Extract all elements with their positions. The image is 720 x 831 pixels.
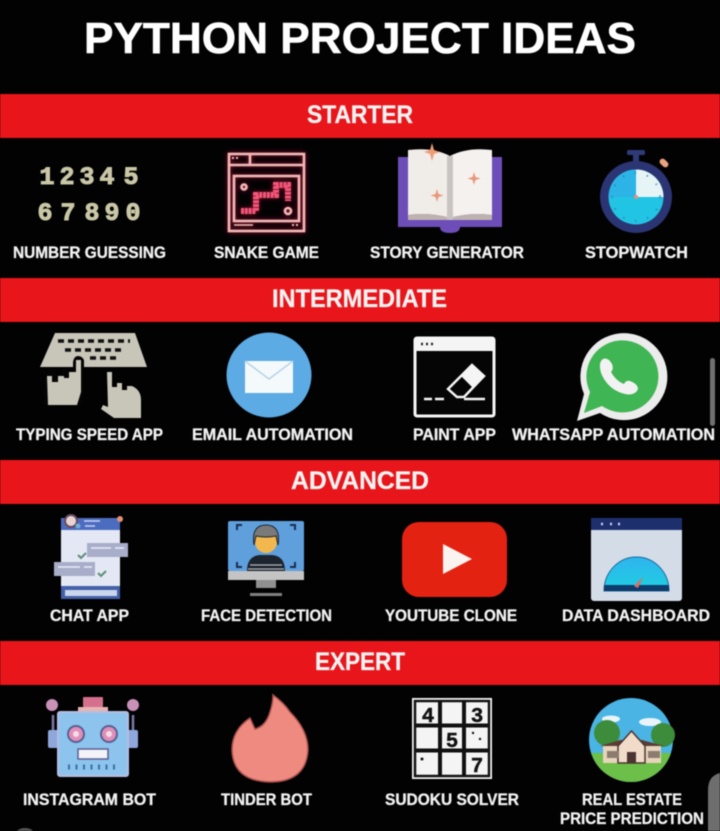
label: face detection: FACE DETECTION [201, 607, 332, 625]
label: sudoku solver: SUDOKU SOLVER [385, 791, 519, 809]
icon: number guessing digits: 3 [79, 163, 95, 192]
icon: number guessing digits: 5 [123, 163, 139, 192]
panel: starter section [0, 94, 720, 262]
icon: youtube [402, 522, 507, 597]
label: typing speed app: TYPING SPEED APP [16, 426, 163, 444]
label: paint app: PAINT APP [413, 426, 496, 444]
icon: number guessing digits: 9 [104, 199, 120, 228]
icon: data dashboard [591, 518, 682, 601]
icon: robot [46, 697, 139, 776]
icon: story book [398, 143, 502, 233]
icon: sudoku grid: 7 [471, 756, 483, 779]
heading band: intermediate [0, 278, 720, 322]
heading band: starter: STARTER [307, 101, 413, 129]
label: youtube clone: YOUTUBE CLONE [385, 607, 517, 625]
icon: tinder flame [232, 695, 308, 782]
icon: sudoku grid: 3 [471, 706, 483, 729]
label: price prediction: PRICE PREDICTION [560, 810, 704, 828]
icon: chat app phone [54, 515, 128, 599]
label: story generator: STORY GENERATOR [370, 244, 524, 262]
icon: number guessing digits: 2 [59, 163, 75, 192]
icon: number guessing digits: 1 [39, 163, 55, 192]
icon: number guessing digits: 4 [99, 163, 115, 192]
icon: sudoku grid [412, 698, 492, 779]
label: data dashboard: DATA DASHBOARD [562, 607, 710, 625]
label: whatsapp automation: WHATSAPP AUTOMATION [512, 426, 715, 444]
icon: face detection monitor [228, 521, 304, 596]
title: PYTHON PROJECT IDEAS [84, 14, 636, 63]
icon: whatsapp [577, 333, 667, 421]
icon: snake game window [229, 154, 304, 231]
label: tinder bot: TINDER BOT [221, 791, 312, 809]
corner overlay bottom left [17, 828, 33, 831]
icon: sudoku grid: 4 [422, 706, 434, 729]
label: email automation: EMAIL AUTOMATION [192, 426, 353, 444]
icon: real estate house [589, 698, 675, 782]
icon: number guessing digits [37, 163, 141, 228]
heading band: expert: EXPERT [315, 648, 405, 676]
icon: typing keyboard and hands [40, 333, 147, 418]
heading band: advanced: ADVANCED [291, 467, 429, 495]
icon: stopwatch [600, 150, 672, 233]
heading band: starter [0, 94, 720, 138]
label: number guessing: NUMBER GUESSING [13, 244, 166, 262]
label: snake game: SNAKE GAME [214, 244, 319, 262]
label: chat app: CHAT APP [50, 607, 129, 625]
scrollbar [710, 358, 715, 426]
heading band: expert [0, 641, 720, 685]
corner overlay bottom right [708, 773, 720, 831]
icon: number guessing digits: 7 [60, 199, 76, 228]
label: instagram bot: INSTAGRAM BOT [23, 791, 156, 809]
panel: intermediate section [0, 278, 720, 444]
label: stopwatch: STOPWATCH [585, 244, 688, 262]
icon: number guessing digits: 6 [37, 199, 53, 228]
icon: sudoku grid: 5 [446, 731, 458, 754]
heading band: intermediate: INTERMEDIATE [272, 285, 447, 313]
icon: number guessing digits: 8 [84, 199, 100, 228]
panel: advanced section [0, 460, 720, 625]
icon: number guessing digits: 0 [125, 199, 141, 228]
label: real estate: REAL ESTATE [582, 791, 682, 809]
panel: expert section [0, 641, 720, 828]
icon: paint app window [415, 338, 494, 416]
heading band: advanced [0, 460, 720, 504]
icon: email [226, 332, 312, 418]
